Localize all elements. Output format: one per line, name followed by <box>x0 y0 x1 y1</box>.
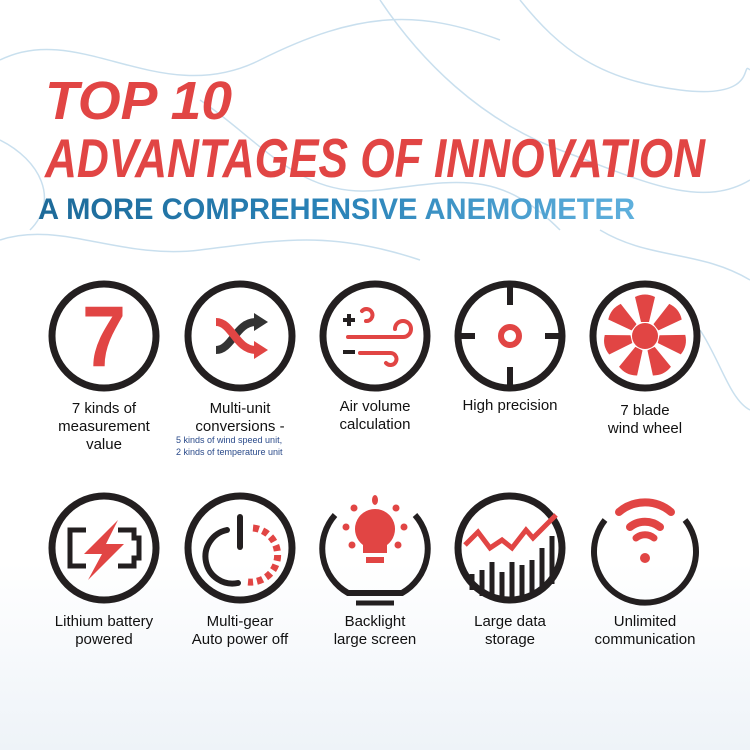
item 4: high precision: High precision <box>462 397 558 414</box>
item 2: multi-unit: Multi-unit <box>210 400 271 417</box>
title: TOP 10: TOP 10 <box>45 71 232 131</box>
item 1: 7 kinds <box>52 284 156 453</box>
item 2: multi-unit: conversions - <box>195 418 285 435</box>
item 9: data storage: Large data <box>474 613 547 630</box>
item 4: high precision <box>458 284 562 414</box>
item 10: wifi <box>594 502 696 648</box>
item 1: 7 kinds: 7 <box>82 289 126 385</box>
item 5: 7 blade wind wheel: wind wheel <box>607 420 682 437</box>
item 7: auto power off: Auto power off <box>192 631 289 648</box>
item 7: auto power off <box>188 496 292 648</box>
item 1: 7 kinds: 7 kinds of <box>72 400 137 417</box>
item 6: lithium battery: Lithium battery <box>55 613 154 630</box>
item 3: air volume: Air volume <box>340 398 410 415</box>
item 9: data storage <box>458 496 562 648</box>
item 8: backlight <box>322 495 428 648</box>
item 5: 7 blade wind wheel <box>593 284 697 437</box>
item 1: 7 kinds: value <box>86 436 122 453</box>
item 1: 7 kinds: measurement <box>58 418 151 435</box>
item 2: multi-unit <box>176 284 292 457</box>
item 5: 7 blade wind wheel: 7 blade <box>620 402 670 419</box>
item 3: air volume: calculation <box>340 416 410 433</box>
item 10: wifi: Unlimited <box>614 613 676 630</box>
item 8: backlight: large screen <box>334 631 416 648</box>
item 6: lithium battery <box>52 496 156 648</box>
item 2: multi-unit: 2 kinds of temperature unit <box>176 447 283 457</box>
item 2: multi-unit: 5 kinds of wind speed unit, <box>176 435 282 445</box>
item 7: auto power off: Multi-gear <box>207 613 273 630</box>
subtitle: A MORE COMPREHENSIVE ANEMOMETER <box>38 193 635 226</box>
item 9: data storage: storage <box>485 631 535 648</box>
item 8: backlight: Backlight <box>345 613 406 630</box>
item 10: wifi: communication <box>595 631 695 648</box>
item 3: air volume <box>323 284 427 433</box>
item 6: lithium battery: powered <box>75 631 133 648</box>
